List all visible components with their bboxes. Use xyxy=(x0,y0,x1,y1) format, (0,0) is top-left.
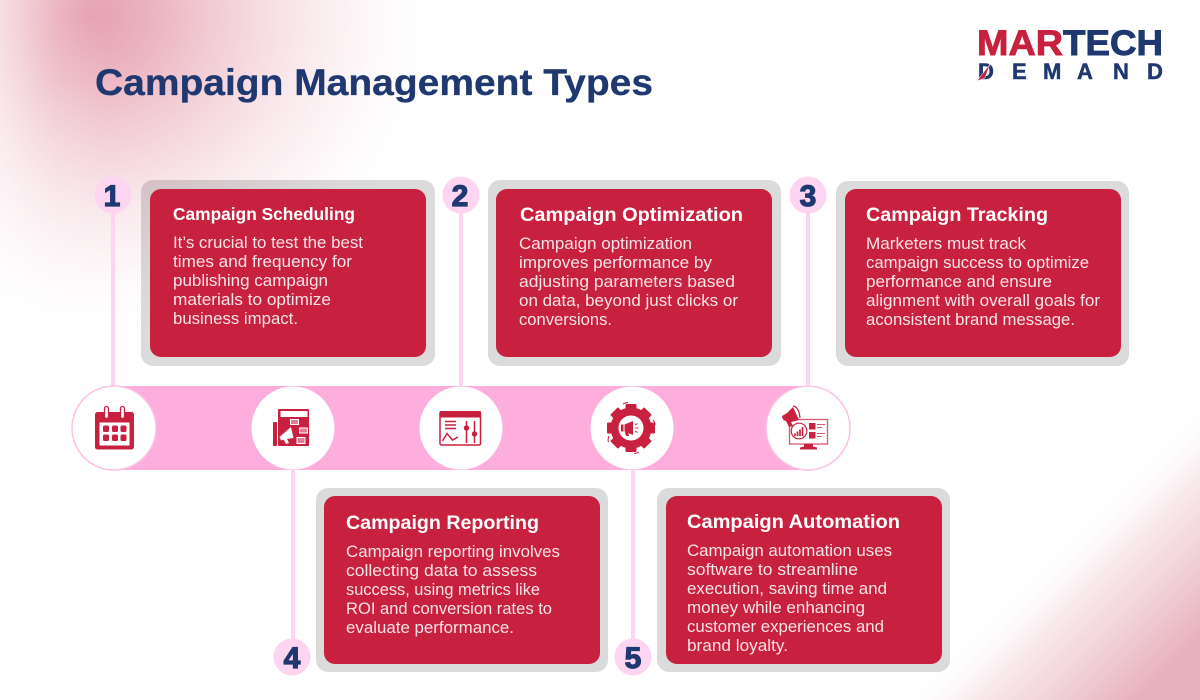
panel: campaign scheduling: It’s crucial to test the best xyxy=(173,233,363,252)
logo: MAR xyxy=(977,24,1063,63)
number badge 1 xyxy=(94,176,132,214)
icon: monitor megaphone xyxy=(782,406,828,450)
panel: campaign scheduling xyxy=(141,180,435,366)
panel: campaign tracking: performance and ensure xyxy=(866,272,1052,291)
icon: newspaper megaphone xyxy=(273,409,309,446)
panel: campaign tracking: alignment with overall goals for xyxy=(866,291,1100,310)
panel: campaign automation: Campaign automation uses xyxy=(687,541,892,560)
number badge 4: 4 xyxy=(284,642,301,675)
number badge 2 xyxy=(442,176,480,214)
panel: campaign reporting: evaluate performance. xyxy=(346,618,514,637)
number badge 5 xyxy=(614,638,652,676)
icon: gear megaphone xyxy=(607,402,655,454)
panel: campaign tracking: aconsistent brand message. xyxy=(866,310,1075,329)
panel: campaign reporting: Campaign Reporting xyxy=(346,512,539,534)
logo: DEMAND xyxy=(978,59,1163,84)
panel: campaign automation xyxy=(657,488,950,672)
panel: campaign tracking: Campaign Tracking xyxy=(866,204,1048,226)
panel: campaign scheduling: materials to optimize xyxy=(173,290,331,309)
connector lines xyxy=(111,200,810,645)
panel: campaign automation: brand loyalty. xyxy=(687,636,788,655)
logo xyxy=(977,24,1163,84)
panel: campaign reporting xyxy=(316,488,608,672)
panel: campaign tracking: campaign success to optimize xyxy=(866,253,1089,272)
panel: campaign automation: software to streamline xyxy=(687,560,858,579)
panel: campaign reporting: success, using metrics like xyxy=(346,580,540,599)
panel: campaign automation: execution, saving time and xyxy=(687,579,887,598)
panel: campaign optimization xyxy=(488,180,781,366)
panel: campaign scheduling: times and frequency for xyxy=(173,252,352,271)
panel: campaign optimization: on data, beyond just clicks or xyxy=(519,291,738,310)
panel: campaign optimization: improves performance by xyxy=(519,253,713,272)
panel: campaign reporting: collecting data to assess xyxy=(346,561,537,580)
panel: campaign scheduling: publishing campaign xyxy=(173,271,328,290)
panel: campaign scheduling: business impact. xyxy=(173,309,298,328)
panel: campaign automation: money while enhancing xyxy=(687,598,865,617)
number badge 3 xyxy=(790,176,826,214)
icon: analytics window xyxy=(440,411,481,445)
panel: campaign automation: customer experiences and xyxy=(687,617,884,636)
panel: campaign tracking xyxy=(836,181,1129,366)
panel: campaign automation: Campaign Automation xyxy=(687,511,900,533)
panel: campaign optimization: Campaign optimization xyxy=(519,234,692,253)
panel: campaign scheduling: Campaign Scheduling xyxy=(173,204,355,224)
icon: calendar xyxy=(95,406,134,450)
title: Campaign Management Types xyxy=(95,62,653,103)
panel: campaign optimization: adjusting parameters based xyxy=(519,272,735,291)
number badge 3: 3 xyxy=(800,180,816,213)
number badge 4 xyxy=(274,638,310,676)
number badge 2: 2 xyxy=(452,180,468,213)
panel: campaign tracking: Marketers must track xyxy=(866,234,1027,253)
panel: campaign optimization: Campaign Optimization xyxy=(520,204,743,226)
number badge 1: 1 xyxy=(104,180,120,213)
logo: TECH xyxy=(1063,24,1163,63)
panel: campaign optimization: conversions. xyxy=(519,310,612,329)
panel: campaign reporting: ROI and conversion rates to xyxy=(346,599,552,618)
number badge 5: 5 xyxy=(625,642,641,675)
timeline band xyxy=(72,386,850,470)
panel: campaign reporting: Campaign reporting involves xyxy=(346,542,560,561)
